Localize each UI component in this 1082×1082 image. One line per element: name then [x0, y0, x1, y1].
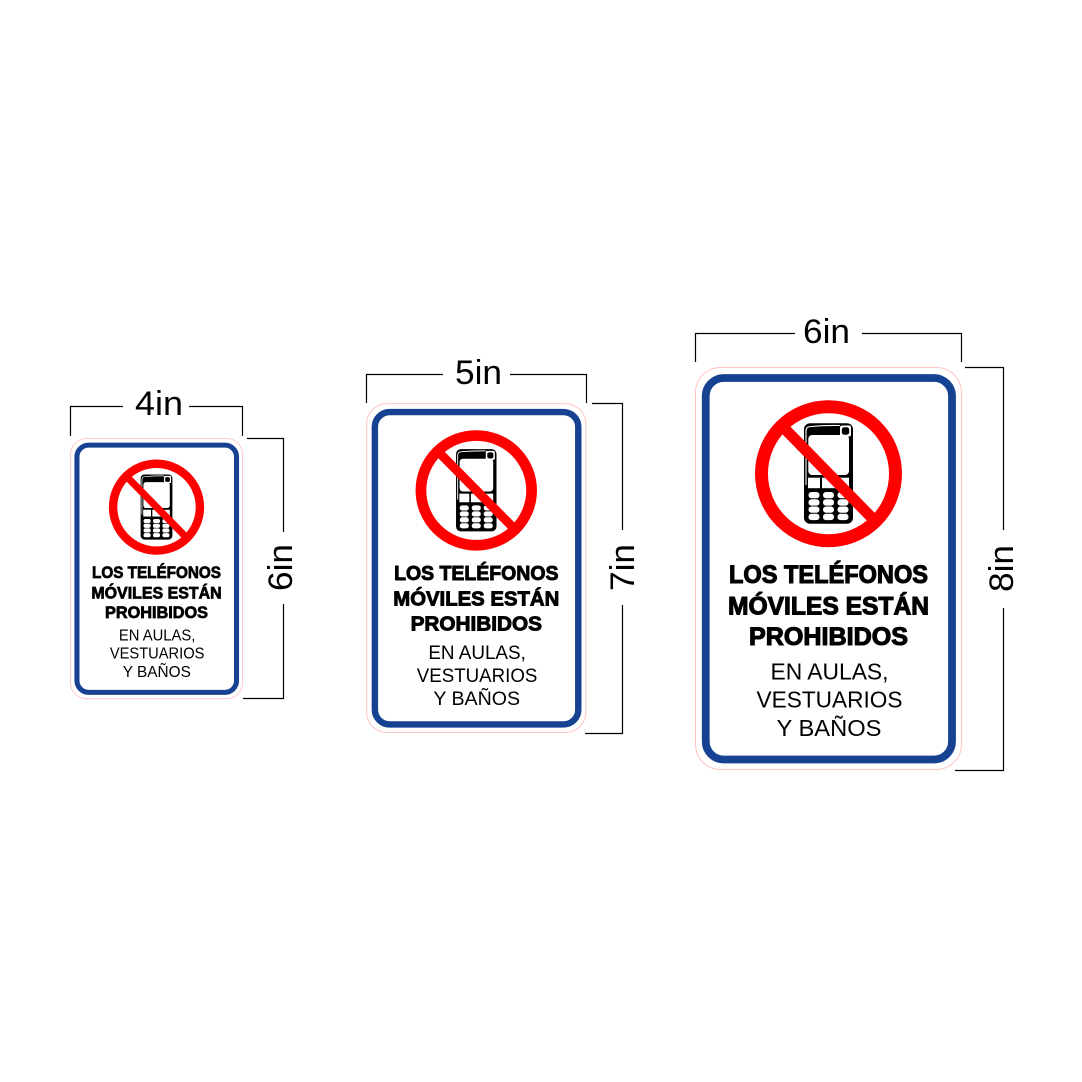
large sign: 6in by 8in — [696, 368, 962, 770]
height dimension: 7in: 7in — [604, 544, 642, 591]
height dimension: 6in — [243, 438, 300, 698]
medium sign: 5in by 7in — [367, 404, 586, 732]
height dimension: 8in — [955, 368, 1021, 770]
subtext: Y BAÑOS — [123, 664, 191, 681]
heading: LOS TELÉFONOS — [394, 562, 558, 585]
subtext: EN AULAS, — [770, 658, 888, 684]
heading: MÓVILES ESTÁN — [728, 590, 929, 620]
heading: LOS TELÉFONOS — [729, 560, 928, 589]
sign outline — [70, 438, 243, 699]
heading: PROHIBIDOS — [411, 613, 542, 636]
heading — [91, 563, 222, 622]
icon: no phones — [113, 464, 200, 551]
sign outline — [696, 368, 962, 770]
subtext — [756, 658, 902, 741]
heading: MÓVILES ESTÁN — [91, 583, 222, 602]
height dimension: 7in — [585, 404, 642, 734]
subtext — [110, 628, 204, 681]
subtext: VESTUARIOS — [417, 666, 537, 687]
heading — [728, 560, 929, 651]
blue border — [77, 445, 237, 692]
heading: PROHIBIDOS — [105, 604, 208, 622]
width dimension: 4in — [70, 385, 242, 436]
subtext: EN AULAS, — [428, 643, 526, 664]
height dimension: 6in: 6in — [262, 544, 300, 591]
subtext — [417, 643, 537, 710]
blue border — [706, 378, 952, 760]
icon: no phones — [762, 407, 896, 541]
sign outline — [367, 404, 586, 732]
subtext: EN AULAS, — [119, 628, 195, 645]
icon: no phones — [421, 436, 532, 545]
subtext: Y BAÑOS — [433, 686, 520, 710]
width dimension: 6in: 6in — [803, 313, 850, 351]
small sign: 4in by 6in — [70, 438, 243, 699]
heading — [393, 562, 559, 636]
heading: LOS TELÉFONOS — [92, 563, 221, 582]
heading: MÓVILES ESTÁN — [393, 587, 559, 611]
subtext: VESTUARIOS — [756, 686, 902, 712]
height dimension: 8in: 8in — [983, 545, 1021, 592]
blue border — [375, 412, 578, 724]
width dimension: 5in — [366, 354, 586, 403]
subtext: Y BAÑOS — [776, 715, 882, 741]
width dimension: 5in: 5in — [455, 354, 502, 392]
subtext: VESTUARIOS — [110, 646, 204, 663]
width dimension: 4in: 4in — [135, 385, 183, 423]
heading: PROHIBIDOS — [749, 623, 908, 651]
width dimension: 6in — [696, 313, 962, 362]
